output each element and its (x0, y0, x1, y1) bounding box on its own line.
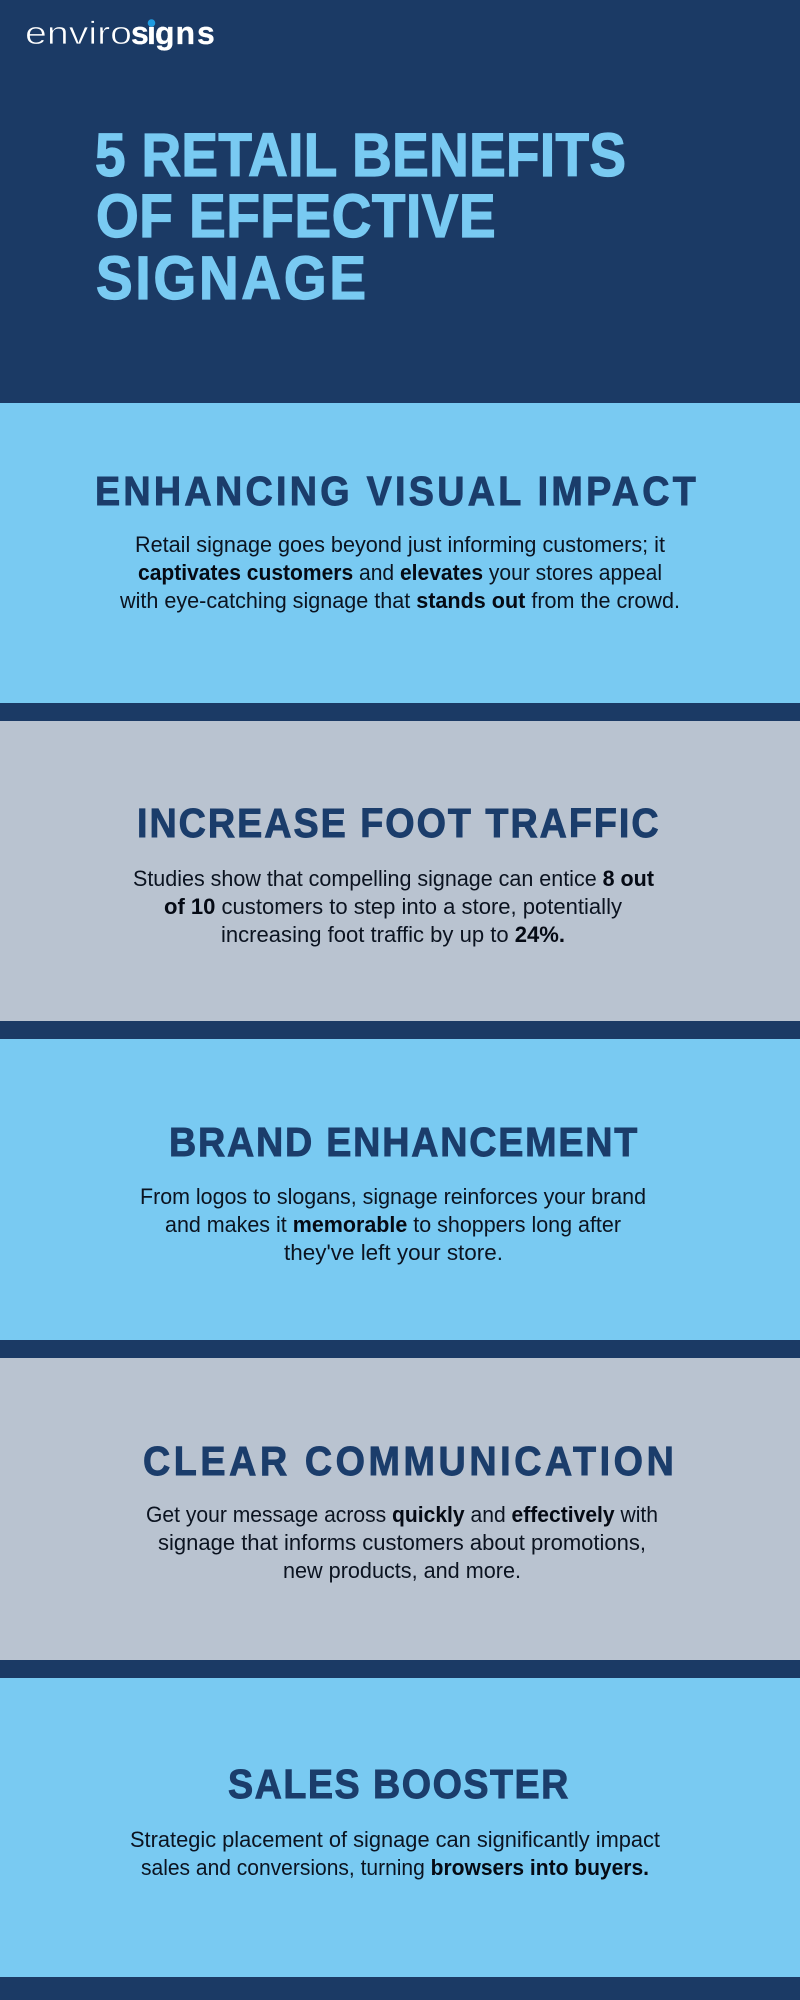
panel: increase foot traffic (0, 721, 800, 1021)
body text: brand enhancement (140, 1184, 646, 1265)
body text: sales booster: Strategic placement of signage can significantly impact (130, 1827, 660, 1852)
logo: envirosigns (25, 15, 215, 51)
body text: clear communication: signage that informs customers about promotions, (158, 1530, 646, 1555)
body text: brand enhancement: From logos to slogans, signage reinforces your brand (140, 1184, 646, 1209)
body text: enhancing visual impact: Retail signage goes beyond just informing customers; it (135, 532, 665, 557)
heading: clear communication: CLEAR COMMUNICATION (143, 1439, 674, 1484)
body text: increase foot traffic (133, 866, 655, 947)
logo: envirosigns: signs (131, 15, 215, 51)
panel: clear communication (0, 1358, 800, 1660)
panel: brand enhancement (0, 1039, 800, 1340)
body text: increase foot traffic: Studies show that compelling signage can entice 8 out (133, 866, 655, 891)
body text: increase foot traffic: increasing foot traffic by up to 24%. (221, 922, 565, 947)
heading: increase foot traffic: INCREASE FOOT TRAFFIC (137, 801, 659, 846)
title: SIGNAGE (96, 244, 366, 313)
panel: sales booster (0, 1678, 800, 1977)
body text: clear communication: Get your message across quickly and effectively with (146, 1502, 658, 1527)
title: OF EFFECTIVE (96, 182, 496, 251)
body text: enhancing visual impact (119, 532, 680, 613)
body text: increase foot traffic: of 10 customers to step into a store, potentially (164, 894, 622, 919)
body text: enhancing visual impact: captivates customers and elevates your stores appeal (138, 560, 662, 585)
body text: sales booster (130, 1827, 660, 1880)
body text: brand enhancement: and makes it memorable to shoppers long after (165, 1212, 621, 1237)
title: 5 RETAIL BENEFITS (95, 121, 626, 190)
heading: brand enhancement: BRAND ENHANCEMENT (169, 1120, 637, 1165)
header panel (25, 15, 626, 313)
logo: envirosigns: enviro (25, 15, 132, 51)
title (95, 121, 626, 313)
body text: clear communication (146, 1502, 658, 1583)
heading: sales booster: SALES BOOSTER (228, 1762, 568, 1807)
body text: enhancing visual impact: with eye-catching signage that stands out from the crowd. (119, 588, 680, 613)
body text: clear communication: new products, and more. (283, 1558, 521, 1583)
heading: enhancing visual impact: ENHANCING VISUAL IMPACT (95, 469, 696, 514)
panel: enhancing visual impact (0, 403, 800, 703)
body text: brand enhancement: they've left your store. (284, 1240, 503, 1265)
body text: sales booster: sales and conversions, turning browsers into buyers. (141, 1855, 649, 1880)
